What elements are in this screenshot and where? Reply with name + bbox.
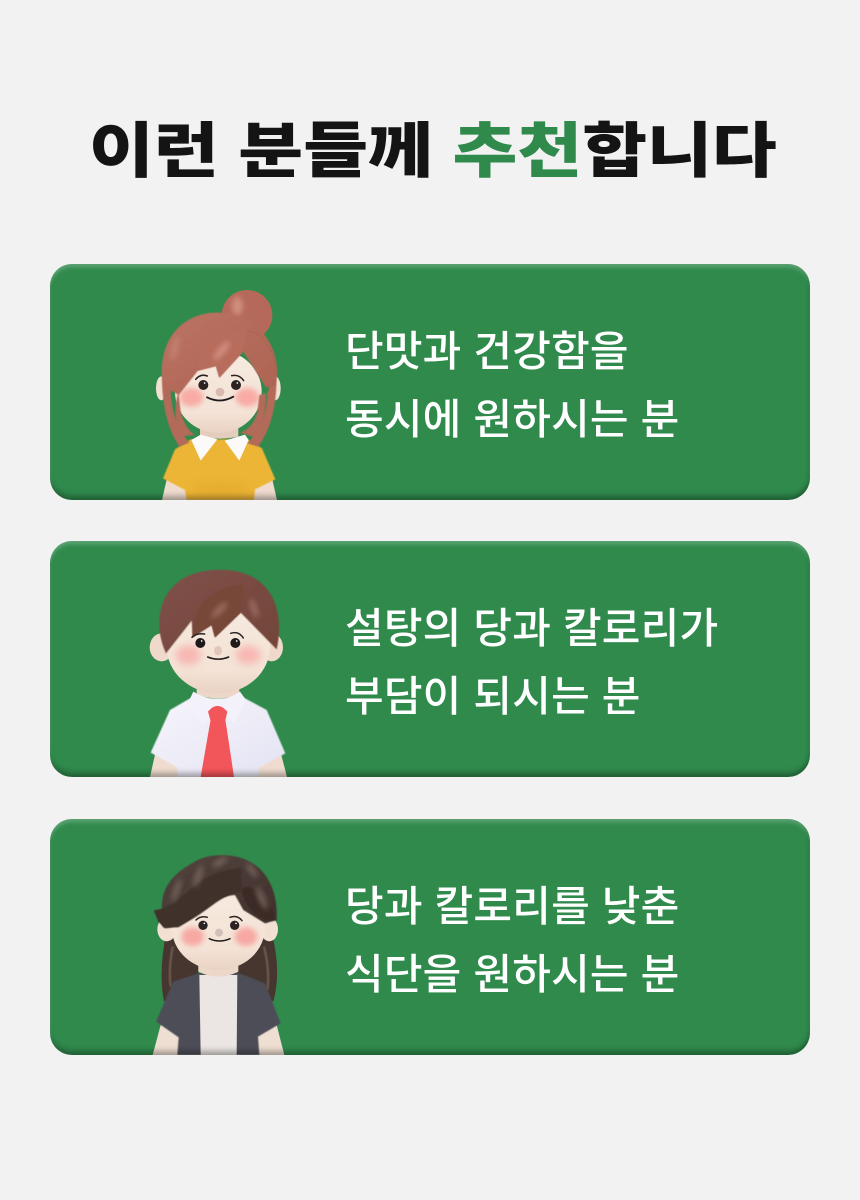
long back hair: [162, 933, 277, 1002]
collar: [191, 435, 249, 461]
cheeks: [176, 645, 261, 665]
text: panel 2 description: 부담이 되시는 분: [345, 673, 641, 720]
eyes and mouth: [196, 375, 244, 401]
text: panel 1 description: [345, 328, 679, 443]
hair: [159, 570, 279, 653]
white shirt: [151, 698, 285, 777]
text: panel 3 description: 당과 칼로리를 낮춘: [345, 883, 679, 930]
yellow shirt: [163, 439, 275, 500]
icon: woman with long dark hair and grey jacket: [152, 854, 284, 1055]
face: [172, 885, 265, 970]
ears: [157, 917, 278, 941]
hair: [154, 855, 277, 928]
neck: [200, 422, 238, 439]
arms: [162, 477, 277, 500]
eyes and mouth: [196, 917, 242, 941]
grey jacket: [156, 973, 281, 1055]
collar: [189, 692, 246, 725]
arms: [150, 750, 287, 777]
ears: [150, 633, 283, 661]
red tie: [201, 706, 234, 777]
white inner shirt: [199, 975, 237, 1055]
neck: [197, 683, 239, 698]
panel: sweet taste and health: [50, 264, 810, 500]
face: [175, 350, 262, 433]
ears: [156, 376, 281, 400]
eyes and mouth: [192, 633, 243, 659]
hair bun: [222, 290, 272, 341]
panel: low sugar diet: [50, 819, 810, 1055]
hair front: [162, 313, 277, 395]
neck: [198, 960, 238, 977]
text: panel 2 description: 설탕의 당과 칼로리가: [345, 605, 718, 652]
text: panel 3 description: [345, 883, 679, 998]
arms: [153, 1025, 284, 1055]
text: panel 3 description: 식단을 원하시는 분: [345, 951, 679, 998]
icon: woman with hair bun and yellow shirt: [156, 290, 281, 500]
panel: sugar and calories: [50, 541, 810, 777]
hair strands: [162, 363, 276, 447]
title: 이런 분들께 추천합니다: [89, 118, 777, 185]
text: panel 1 description: 단맛과 건강함을: [345, 328, 629, 375]
icon: man with white shirt and red tie: [150, 569, 287, 777]
text: panel 2 description: [345, 605, 718, 720]
cheeks: [179, 388, 259, 407]
text: panel 1 description: 동시에 원하시는 분: [345, 396, 679, 443]
face: [167, 600, 270, 693]
cheeks: [181, 927, 257, 946]
